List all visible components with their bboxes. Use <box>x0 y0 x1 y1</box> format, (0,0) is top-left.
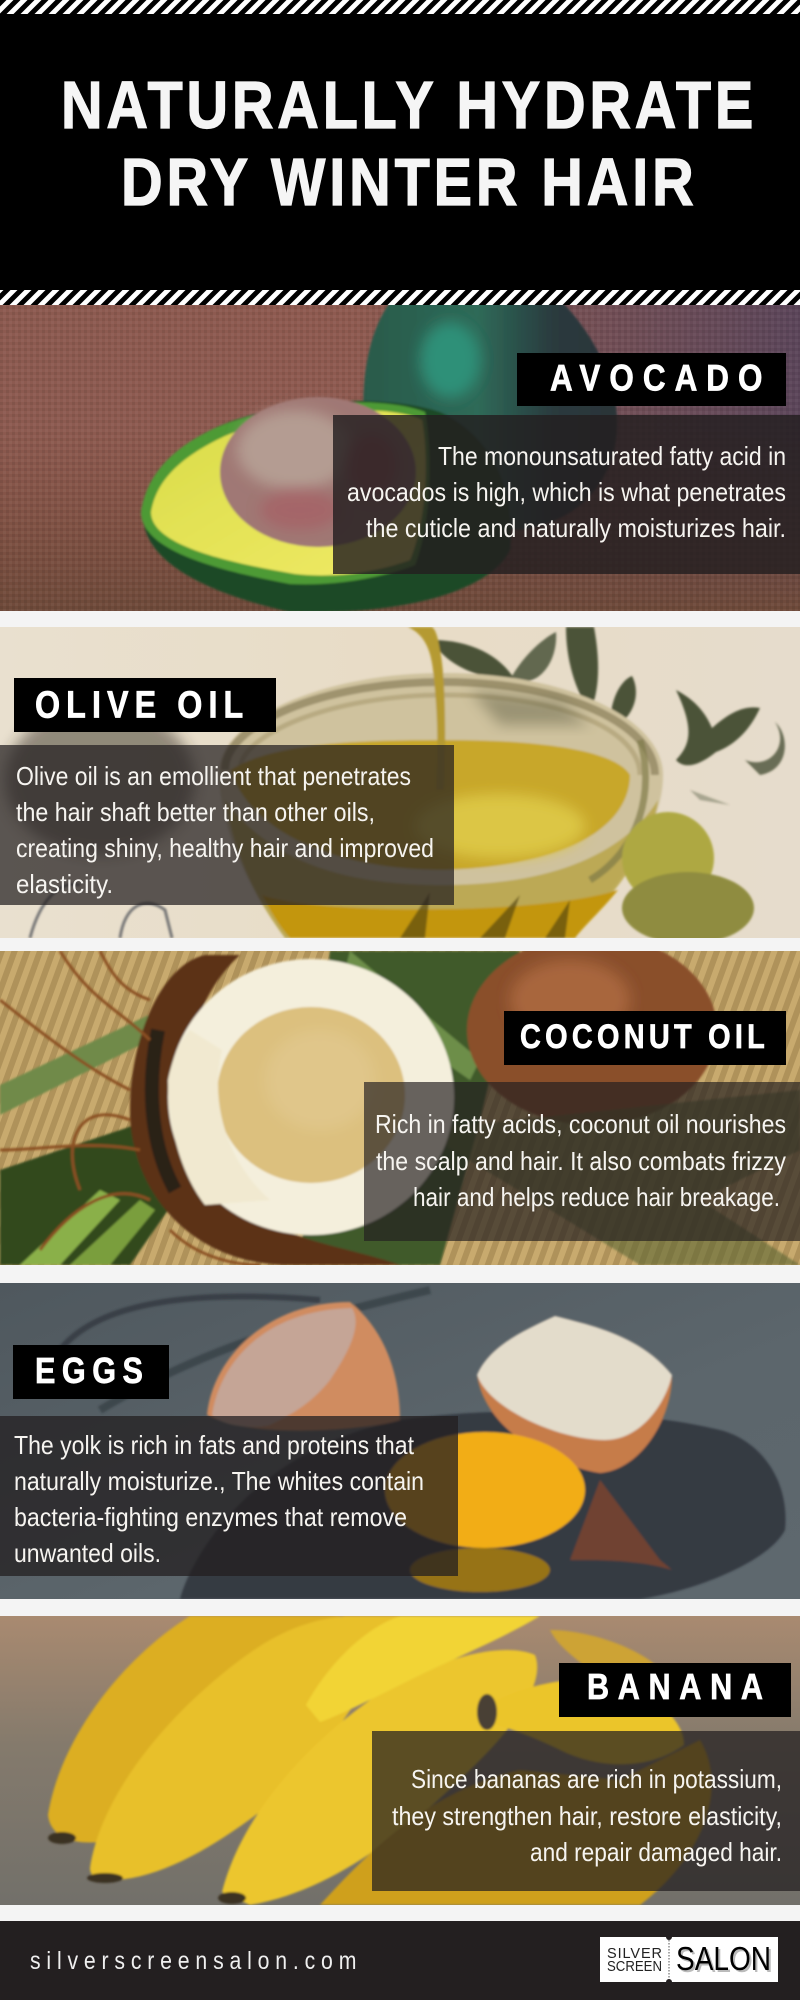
panel: banana <box>0 1616 800 1905</box>
logo: Silver Screen Salon ticket <box>600 1934 778 1985</box>
text block: eggs: bacteria-fighting enzymes that remove <box>14 1502 407 1532</box>
heading: eggs: EGGS <box>35 1352 143 1392</box>
title: DRY WINTER HAIR <box>121 145 694 220</box>
title: NATURALLY HYDRATE <box>61 68 753 143</box>
heading: olive oil: OLIVE OIL <box>35 684 243 726</box>
logo: Silver Screen Salon ticket: SALON <box>678 1942 773 1979</box>
header panel <box>0 0 800 305</box>
photo: coconut <box>0 935 800 1265</box>
text block: banana <box>372 1731 800 1891</box>
black header background <box>0 14 800 290</box>
text block: olive oil: creating shiny, healthy hair and improved <box>16 833 434 863</box>
text block: olive oil: elasticity. <box>16 869 113 899</box>
panel: avocado <box>0 300 800 612</box>
panel: eggs <box>0 1283 800 1599</box>
heading: avocado <box>517 353 786 406</box>
panel: olive oil <box>0 627 800 944</box>
text block: eggs <box>0 1416 458 1576</box>
heading: olive oil <box>14 678 276 732</box>
text block: eggs: naturally moisturize., The whites contain <box>14 1466 424 1496</box>
text block: eggs: The yolk is rich in fats and proteins that <box>14 1430 415 1460</box>
text block: coconut oil <box>364 1082 800 1241</box>
photo: bananas <box>0 1616 800 1905</box>
website url: silverscreensalon.com <box>30 1946 356 1974</box>
photo: olive oil bowl <box>0 627 800 944</box>
panel: coconut oil <box>0 935 800 1265</box>
text block: olive oil: the hair shaft better than other oils, <box>16 797 375 827</box>
heading: coconut oil: COCONUT OIL <box>520 1017 765 1056</box>
text block: olive oil: Olive oil is an emollient that penetrates <box>16 761 411 791</box>
text block: eggs: unwanted oils. <box>14 1538 161 1568</box>
text block: olive oil <box>0 745 454 905</box>
logo: Silver Screen Salon ticket: SILVER <box>607 1946 662 1962</box>
logo: Silver Screen Salon ticket: SALON <box>676 1940 771 1977</box>
logo: Silver Screen Salon ticket: SCREEN <box>607 1959 662 1975</box>
title <box>61 68 753 220</box>
heading: banana: BANANA <box>587 1668 763 1708</box>
photo: eggs <box>0 1283 800 1599</box>
heading: eggs <box>13 1345 169 1399</box>
top striped band <box>0 0 800 14</box>
heading: coconut oil <box>504 1011 786 1065</box>
text block: avocado <box>333 415 800 574</box>
heading: avocado: AVOCADO <box>550 358 763 399</box>
footer <box>0 1921 800 2000</box>
lower striped band <box>0 290 800 305</box>
photo: avocado <box>0 300 800 612</box>
heading: banana <box>559 1663 791 1717</box>
